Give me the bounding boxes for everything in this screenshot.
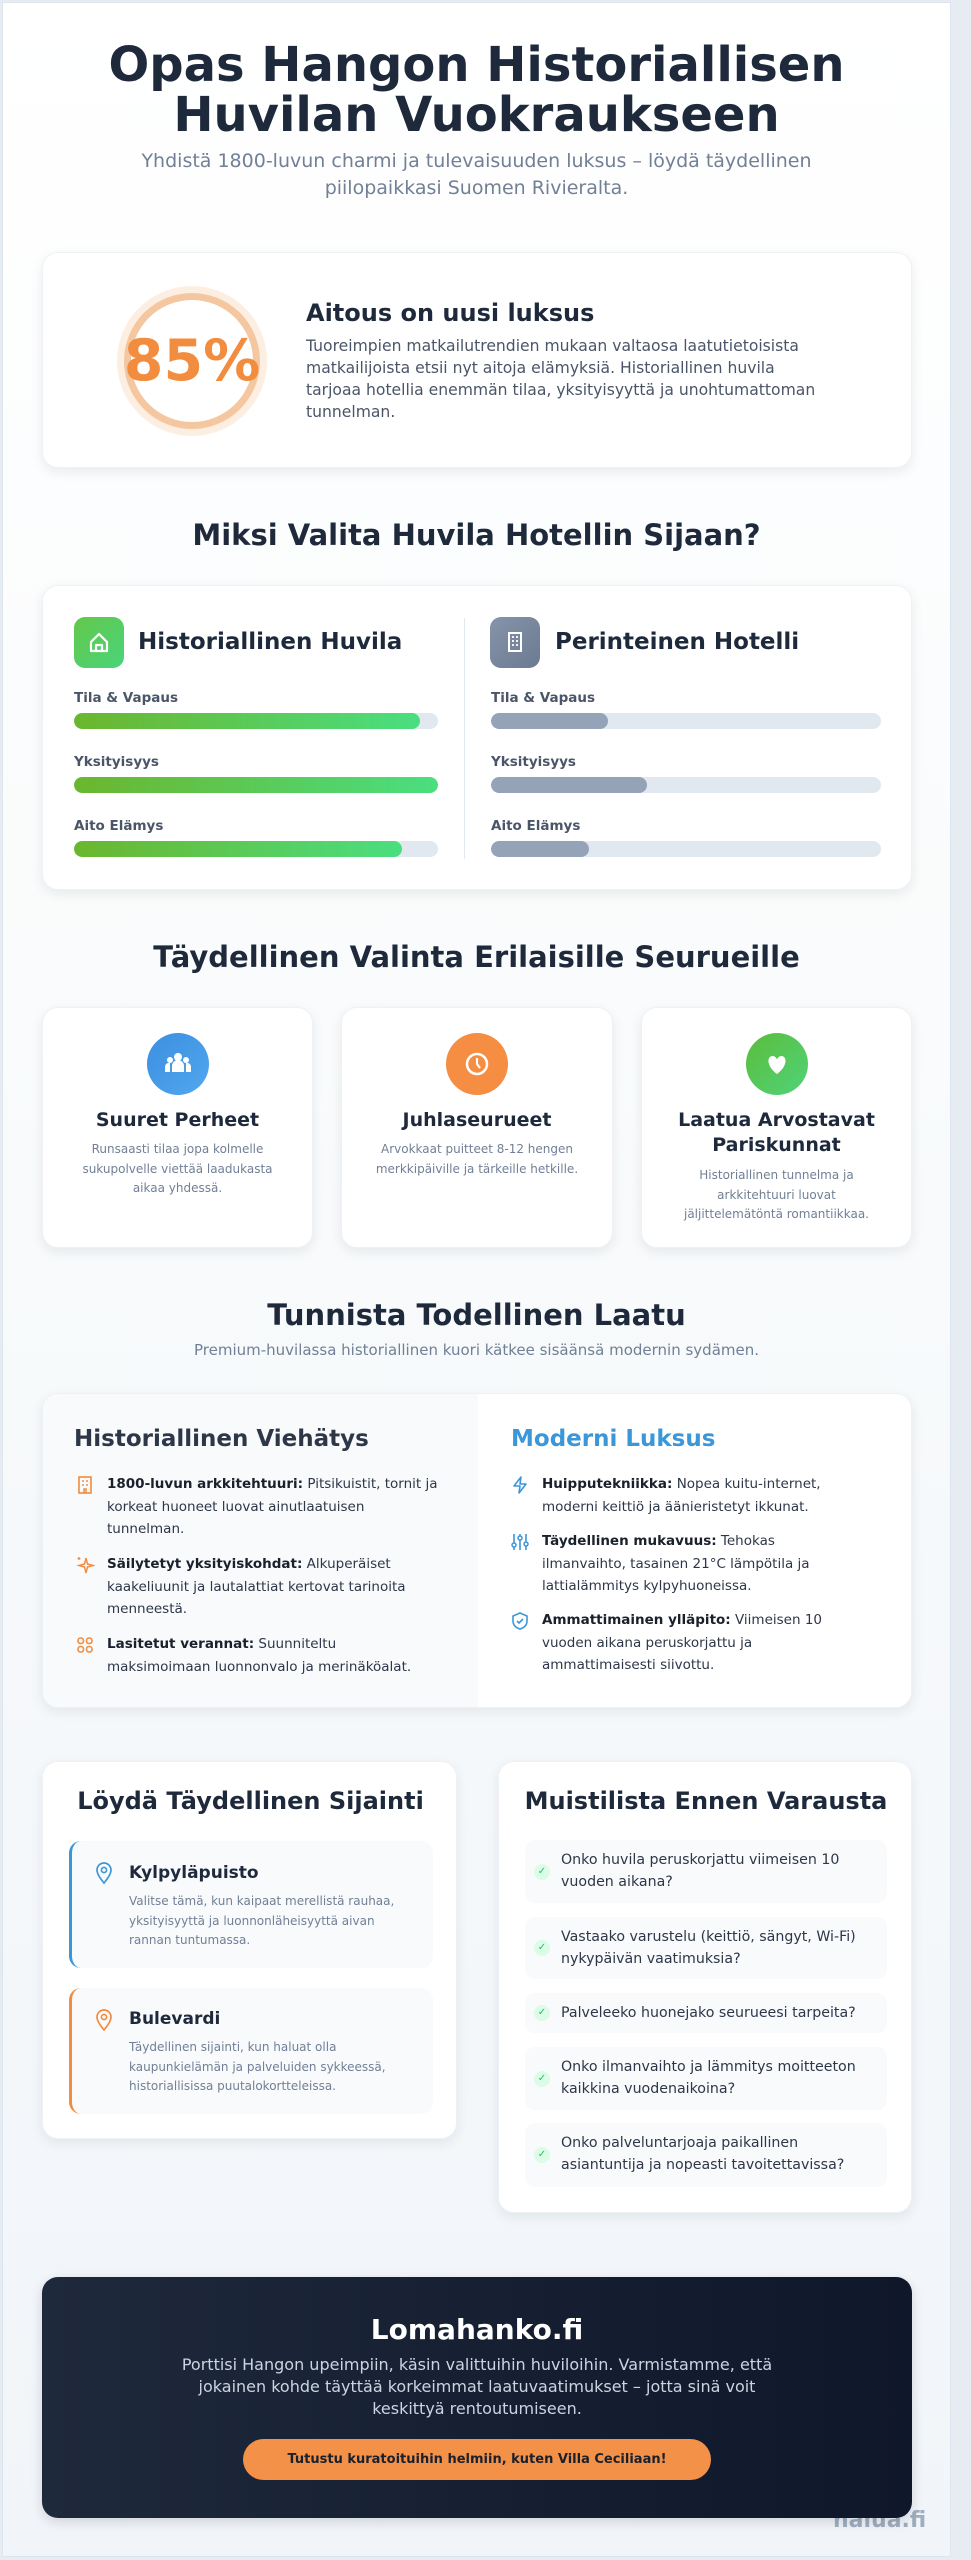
stat text — [306, 337, 815, 421]
checklist items — [534, 1852, 856, 2173]
villa column: Tila & Vapaus — [74, 690, 178, 706]
footer title: Lomahanko.fi — [371, 2313, 583, 2346]
villa column: Aito Elämys — [74, 818, 163, 834]
hotel column: Tila & Vapaus — [491, 690, 595, 706]
icon: heart — [746, 1033, 808, 1095]
title: Huvilan Vuokraukseen — [173, 87, 780, 143]
historic column heading: Historiallinen Viehätys — [74, 1426, 369, 1452]
stat circle — [117, 286, 267, 436]
footer text: Porttisi Hangon upeimpiin, käsin valittuihin huviloihin. Varmistamme, että — [182, 2355, 772, 2374]
heading: groups: Täydellinen Valinta Erilaisille Seurueille — [153, 940, 800, 974]
panel: large families — [42, 1007, 313, 1248]
historic item 3 — [77, 1636, 411, 1674]
subtitle — [141, 150, 812, 199]
checklist items: Onko palveluntarjoaja paikallinen — [561, 2135, 798, 2151]
quality subtitle: Premium-huvilassa historiallinen kuori kätkee sisäänsä modernin sydämen. — [194, 1341, 759, 1359]
checklist items: Onko ilmanvaihto ja lämmitys moitteeton — [561, 2059, 856, 2075]
footer text: jokainen kohde täyttää korkeimmat laatuvaatimukset – jotta sinä voit — [199, 2377, 755, 2396]
location heading: Löydä Täydellinen Sijainti — [77, 1787, 424, 1815]
panel: footer CTA — [42, 2277, 912, 2518]
heading: quality: Tunnista Todellinen Laatu — [267, 1298, 686, 1332]
hotel heading: Perinteinen Hotelli — [555, 629, 799, 655]
checklist items: Onko huvila peruskorjattu viimeisen 10 — [561, 1852, 839, 1868]
hotel column — [490, 617, 881, 857]
modern item 2: Täydellinen mukavuus: Tehokas ilmanvaihto, tasainen 21°C lämpötila ja lattialämmitys kylpyhuoneissa. — [542, 1533, 810, 1594]
checklist items: vuoden aikana? — [561, 1874, 673, 1890]
location: Kylpyläpuisto: Valitse tämä, kun kaipaat merellistä rauhaa, yksityisyyttä ja luonnonläheisyyttä aivan rannan tuntumassa. — [129, 1894, 394, 1947]
icon: people — [147, 1033, 209, 1095]
checklist items: Vastaako varustelu (keittiö, sängyt, Wi-Fi) — [561, 1929, 856, 1945]
panel: celebrations — [341, 1007, 613, 1248]
heading: why villa: Miksi Valita Huvila Hotellin Sijaan? — [192, 518, 761, 552]
stat circle: 85% — [124, 328, 260, 394]
historic item 1: 1800-luvun arkkitehtuuri: Pitsikuistit, tornit ja korkeat huoneet luovat ainutlaatuisen tunnelman. — [107, 1476, 438, 1537]
stat text: tarjoaa hotellia enemmän tilaa, yksityisyyttä ja unohtumattoman — [306, 381, 815, 399]
checklist items: ✓ — [538, 2149, 546, 2160]
historic item 3: maksimoimaan luonnonvalo ja merinäköalat. — [107, 1658, 411, 1674]
panel: quality comparison — [42, 1393, 912, 1708]
villa column: Yksityisyys — [74, 754, 159, 770]
panel: comparison — [42, 585, 912, 890]
panel: couples — [641, 1007, 912, 1248]
subtitle: piilopaikkasi Suomen Rivieralta. — [325, 177, 628, 199]
panel: checklist — [498, 1761, 912, 2213]
subtitle: Yhdistä 1800-luvun charmi ja tulevaisuuden luksus – löydä täydellinen — [141, 150, 812, 172]
footer text: keskittyä rentoutumiseen. — [372, 2399, 582, 2418]
icon: clock — [446, 1033, 508, 1095]
stat text: Tuoreimpien matkailutrendien mukaan valtaosa laatutietoisista — [306, 337, 799, 355]
panel: celebrations: Arvokkaat puitteet 8-12 hengen merkkipäiville ja tärkeille hetkille. — [376, 1142, 578, 1176]
checklist heading: Muistilista Ennen Varausta — [525, 1787, 887, 1815]
stat text: tunnelman. — [306, 403, 395, 421]
icon: pin orange — [96, 2009, 112, 2032]
checklist items: ✓ — [538, 1942, 546, 1953]
location: Bulevardi: Täydellinen sijainti, kun haluat olla kaupunkielämän ja palveluiden sykkeessä, historiallisissa puutalokortteleissa. — [129, 2040, 386, 2093]
panel: large families: Suuret Perheet — [96, 1109, 259, 1131]
location: Kylpyläpuisto — [69, 1841, 433, 1968]
historic item 2: Säilytetyt yksityiskohdat: Alkuperäiset kaakeliuunit ja lautalattiat kertovat tarinoita menneestä. — [107, 1556, 406, 1617]
stat heading: Aitous on uusi luksus — [306, 299, 594, 327]
modern column heading: Moderni Luksus — [511, 1426, 715, 1452]
location: Bulevardi: Bulevardi — [129, 2009, 220, 2029]
stat text: matkailijoista etsii nyt aitoja elämyksiä. Historiallinen huvila — [306, 359, 775, 377]
panel: large families: Runsaasti tilaa jopa kolmelle sukupolvelle viettää laadukasta aikaa yhdessä. — [82, 1142, 273, 1195]
panel: couples: Laatua Arvostavat — [678, 1109, 875, 1131]
panel: statistic 85% — [42, 252, 912, 468]
checklist items: ✓ — [538, 1866, 546, 1877]
checklist items: nykypäivän vaatimuksia? — [561, 1951, 741, 1967]
footer text — [182, 2355, 772, 2418]
modern item 1: Huipputekniikka: Nopea kuitu-internet, moderni keittiö ja äänieristetyt ikkunat. — [542, 1476, 821, 1514]
villa heading: Historiallinen Huvila — [138, 629, 402, 655]
hotel column: Yksityisyys — [491, 754, 576, 770]
icon: hotel building — [490, 617, 540, 668]
panel: couples: Historiallinen tunnelma ja arkkitehtuuri luovat jäljittelemätöntä romantiikkaa. — [684, 1168, 869, 1221]
location: Kylpyläpuisto: Kylpyläpuisto — [129, 1863, 259, 1883]
villa column — [74, 617, 438, 857]
checklist items: Palveleeko huonejako seurueesi tarpeita? — [561, 2005, 856, 2021]
checklist items: kaikkina vuodenaikoina? — [561, 2081, 735, 2097]
title — [108, 37, 845, 143]
checklist items: asiantuntija ja nopeasti tavoitettavissa? — [561, 2157, 844, 2173]
historic item 3: Lasitetut verannat: Suunniteltu — [107, 1636, 336, 1652]
modern item 3: Ammattimainen ylläpito: Viimeisen 10 vuoden aikana peruskorjattu ja ammattimaisesti siivottu. — [542, 1612, 822, 1673]
panel: couples: Pariskunnat — [712, 1134, 841, 1156]
panel: location — [42, 1761, 457, 2139]
location: Bulevardi — [69, 1988, 433, 2114]
checklist items: ✓ — [538, 2073, 546, 2084]
icon: pin — [96, 1862, 112, 1884]
watermark: nalua.fi — [833, 2508, 926, 2533]
checklist items: ✓ — [538, 2007, 546, 2018]
CTA button — [243, 2439, 711, 2480]
hotel column: Aito Elämys — [491, 818, 580, 834]
icon: house — [74, 617, 124, 668]
panel: celebrations: Juhlaseurueet — [403, 1109, 551, 1131]
title: Opas Hangon Historiallisen — [108, 37, 845, 93]
CTA button: Tutustu kuratoituihin helmiin, kuten Villa Ceciliaan! — [287, 2452, 667, 2467]
